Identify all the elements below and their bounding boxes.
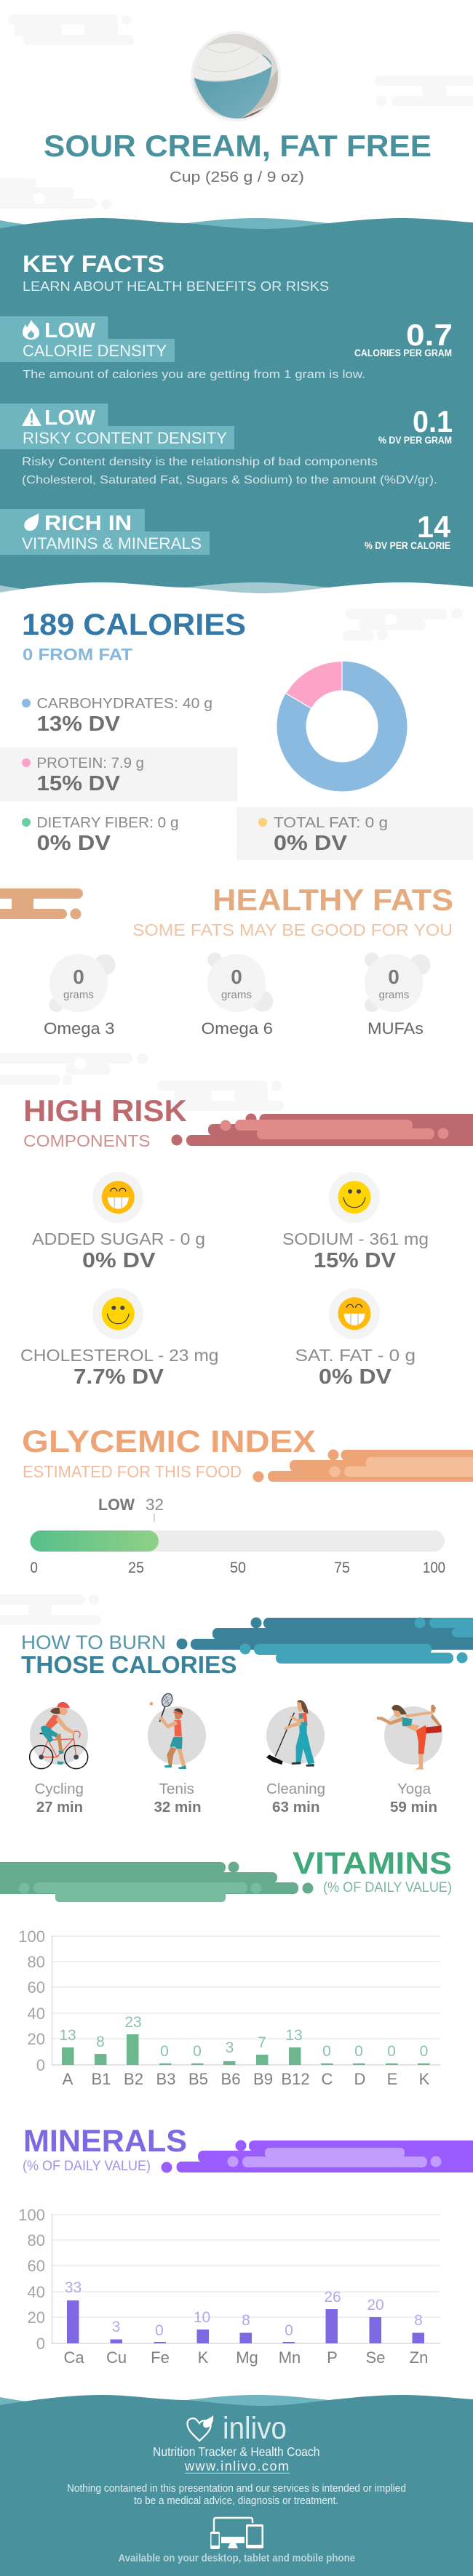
item: sodium: 15% DV [314, 1249, 397, 1272]
disclaimer: to be a medical advice, diagnosis or treatment. [134, 2495, 338, 2507]
brand name: inlivo [223, 2411, 287, 2446]
bar chart: vitamins: B12 [281, 2070, 310, 2088]
activity: cycling: 27 min [36, 1799, 83, 1815]
panel: healthy fats [0, 883, 453, 1038]
subheading: from fat: 0 FROM FAT [23, 645, 132, 664]
unit: CALORIES PER GRAM [354, 348, 452, 358]
panel: vitamins [0, 1846, 452, 2088]
bar chart: minerals: Ca [63, 2348, 84, 2367]
macro: total fat [236, 807, 473, 860]
bar chart: minerals: K [198, 2348, 209, 2367]
stat: omega 6 [201, 952, 274, 1038]
bar chart: vitamins [18, 1927, 440, 2088]
macro: carbohydrates: 13% DV [36, 713, 121, 736]
item: cholesterol: 7.7% DV [73, 1365, 164, 1389]
icon: leaf [24, 513, 39, 531]
value: 0.1 [413, 404, 453, 438]
disclaimer [67, 2482, 406, 2507]
bar chart: minerals: 0 [285, 2322, 293, 2339]
panel: minerals [18, 2124, 473, 2367]
bar chart: minerals [18, 2206, 440, 2367]
gauge scale: 75 [334, 1560, 350, 1576]
item: saturated fat: 0% DV [319, 1365, 392, 1389]
bar chart: vitamins: 60 [28, 1978, 45, 1997]
rating label [98, 1496, 164, 1522]
label: VITAMINS & MINERALS [22, 534, 202, 553]
activity: cleaning: 63 min [272, 1799, 320, 1815]
heading: calories: 189 CALORIES [22, 607, 246, 641]
serving size: Cup (256 g / 9 oz) [170, 169, 304, 185]
bar chart: minerals: 80 [28, 2231, 45, 2250]
heading: healthy fats: HEALTHY FATS [212, 883, 453, 917]
bar chart: vitamins: A [63, 2070, 73, 2088]
macro: dietary fiber [22, 814, 179, 855]
stat: mufas: 0 [388, 966, 400, 988]
bar chart: minerals: 0 [155, 2322, 164, 2339]
bar chart: vitamins: 20 [28, 2030, 45, 2048]
bar chart: vitamins: 0 [36, 2056, 45, 2074]
bar chart: minerals: 26 [324, 2289, 341, 2306]
bar chart: vitamins: 0 [160, 2043, 169, 2060]
bar chart: minerals: 60 [28, 2257, 45, 2275]
stat: mufas: grams [378, 989, 409, 1001]
icon: devices [210, 2518, 263, 2549]
item: added sugar: 0% DV [82, 1249, 156, 1272]
disclaimer: Nothing contained in this presentation and our services is intended or implied [67, 2482, 406, 2495]
subheading: components: COMPONENTS [23, 1131, 151, 1150]
bar chart: vitamins: B1 [92, 2070, 111, 2088]
bar chart: vitamins: B3 [156, 2070, 175, 2088]
bar chart: vitamins: 80 [28, 1953, 45, 1971]
heading: vitamins: VITAMINS [293, 1846, 452, 1881]
unit: % DV PER CALORIE [365, 540, 450, 551]
bar chart: vitamins: B5 [188, 2070, 208, 2088]
bar chart: vitamins: 0 [322, 2043, 331, 2060]
heading: bold line: THOSE CALORIES [21, 1651, 237, 1678]
bar chart: minerals: Zn [410, 2348, 428, 2367]
subheading: (% OF DAILY VALUE) [323, 1880, 452, 1895]
icon: yoga pose [377, 1704, 442, 1770]
activity: tennis [148, 1692, 206, 1815]
fact: rich in vitamins and minerals [0, 509, 451, 555]
bar chart: vitamins: 13 [285, 2027, 303, 2044]
food photo: bowl of sour cream [191, 31, 282, 122]
heading: high risk: HIGH RISK [23, 1094, 187, 1128]
panel: calories [0, 607, 473, 860]
stat: omega 3 [44, 954, 115, 1038]
bar chart: minerals: 100 [18, 2206, 45, 2224]
bar chart: vitamins: 0 [387, 2043, 396, 2060]
label: CALORIE DENSITY [23, 342, 167, 360]
bar chart: minerals: Cu [106, 2348, 127, 2367]
subheading: ESTIMATED FOR THIS FOOD [23, 1462, 242, 1481]
activity: yoga [377, 1704, 442, 1815]
activity: yoga: 59 min [390, 1799, 437, 1815]
icon: smiling face [338, 1181, 371, 1213]
macro: total fat: 0% DV [274, 832, 348, 855]
macro: total fat: TOTAL FAT: 0 g [274, 814, 388, 831]
website link: www.inlivo.com [184, 2459, 289, 2473]
bar chart: minerals: Mg [236, 2348, 258, 2367]
gauge scale: 25 [128, 1560, 144, 1576]
bar chart: vitamins: E [387, 2070, 397, 2088]
activity: cycling [30, 1702, 88, 1815]
stat: omega 6: grams [221, 989, 252, 1001]
bar chart: vitamins: D [354, 2070, 365, 2088]
icon: inlivo heart logo [187, 2415, 213, 2441]
gauge scale: 50 [230, 1560, 246, 1576]
bar chart: minerals: 3 [112, 2319, 120, 2335]
panel: glycemic index [22, 1424, 473, 1576]
bar chart: minerals: 20 [28, 2308, 45, 2327]
bar chart: vitamins: 0 [420, 2043, 428, 2060]
subheading: LEARN ABOUT HEALTH BENEFITS OR RISKS [23, 279, 329, 294]
description: (Cholesterol, Saturated Fat, Sugars & Sodium) to the amount (%DV/gr). [22, 474, 437, 486]
stat: omega 3: 0 [73, 966, 84, 988]
bar chart: minerals: 8 [242, 2312, 250, 2329]
item: sodium: SODIUM - 361 mg [282, 1229, 429, 1248]
bar chart: minerals: Mn [279, 2348, 301, 2367]
bar chart: vitamins: 40 [28, 2005, 45, 2023]
icon: person sweeping [266, 1700, 314, 1767]
description [22, 456, 437, 486]
stat: mufas [365, 952, 431, 1038]
bar chart: vitamins: 23 [124, 2014, 142, 2031]
gauge scale [31, 1560, 445, 1576]
bar chart: vitamins: B2 [124, 2070, 143, 2088]
stat: omega 6: Omega 6 [201, 1019, 273, 1038]
macro: protein: PROTEIN: 7.9 g [36, 755, 144, 771]
stat: omega 3: Omega 3 [44, 1019, 115, 1038]
rating label: 32 [146, 1496, 164, 1514]
fact: risky content density [0, 404, 453, 486]
item: added sugar: ADDED SUGAR - 0 g [32, 1229, 205, 1248]
bar chart: vitamins: C [322, 2070, 333, 2088]
bar chart: vitamins: 3 [226, 2039, 234, 2056]
activity: tennis: Tenis [159, 1781, 194, 1797]
tagline: Nutrition Tracker & Health Coach [153, 2444, 320, 2459]
activity: yoga: Yoga [397, 1781, 432, 1797]
bar chart: minerals: 0 [36, 2335, 45, 2353]
item: cholesterol: CHOLESTEROL - 23 mg [20, 1346, 218, 1365]
donut chart [286, 661, 393, 777]
rating: LOW [44, 406, 96, 430]
bar chart: vitamins: B9 [253, 2070, 273, 2088]
item: saturated fat: SAT. FAT - 0 g [295, 1346, 416, 1365]
bar chart: vitamins: 0 [354, 2043, 363, 2060]
availability note: Available on your desktop, tablet and mobile phone [118, 2552, 355, 2564]
macro: protein: 15% DV [36, 772, 121, 795]
rating label: LOW [98, 1496, 135, 1514]
icon: cyclist [30, 1702, 88, 1769]
panel: high risk components [20, 1094, 473, 1389]
bar chart: vitamins: 7 [258, 2034, 266, 2051]
icon: flame [23, 320, 39, 340]
description: Risky Content density is the relationship of bad components [22, 456, 378, 468]
icon: smiling face [102, 1297, 135, 1330]
gauge scale: 0 [31, 1560, 38, 1576]
icon: tennis player [150, 1692, 186, 1769]
gauge scale: 100 [423, 1560, 445, 1576]
item: saturated fat [295, 1288, 416, 1389]
macro: dietary fiber: DIETARY FIBER: 0 g [36, 814, 179, 831]
macro: carbohydrates: CARBOHYDRATES: 40 g [36, 695, 212, 712]
bar chart: vitamins: 100 [18, 1927, 45, 1946]
value: 0.7 [406, 318, 453, 352]
icon: grinning face [338, 1297, 371, 1330]
value: 14 [417, 510, 451, 544]
subheading: SOME FATS MAY BE GOOD FOR YOU [132, 920, 453, 939]
bar chart: minerals: Fe [151, 2348, 170, 2367]
bar chart: minerals: 33 [65, 2279, 82, 2296]
heading: key facts: KEY FACTS [23, 251, 164, 277]
panel: footer [0, 2395, 473, 2576]
bar chart: minerals: 20 [367, 2297, 384, 2314]
rating: LOW [44, 319, 96, 342]
bar chart: minerals: P [327, 2348, 338, 2367]
fact: calorie density [0, 316, 453, 381]
activity: tennis: 32 min [154, 1799, 201, 1815]
stat: omega 6: 0 [231, 966, 242, 988]
stat: omega 3: grams [63, 989, 94, 1001]
bar chart: minerals: 8 [414, 2312, 423, 2329]
heading: glycemic index: GLYCEMIC INDEX [22, 1424, 316, 1459]
bar chart: vitamins: 0 [193, 2043, 202, 2060]
rating: RICH IN [44, 512, 132, 535]
heading: HOW TO BURN [21, 1632, 166, 1653]
gauge bar [31, 1530, 445, 1552]
subheading: (% OF DAILY VALUE) [23, 2159, 151, 2174]
bar chart: vitamins: 13 [59, 2027, 76, 2044]
activity: cleaning [266, 1700, 325, 1815]
label: RISKY CONTENT DENSITY [23, 429, 227, 447]
icon: warning [22, 408, 41, 426]
bar chart: minerals: 10 [194, 2309, 210, 2326]
heading: minerals: MINERALS [23, 2124, 187, 2159]
bar chart: minerals: Se [366, 2348, 385, 2367]
bar chart: vitamins: B6 [221, 2070, 240, 2088]
icon: grinning face [102, 1181, 135, 1213]
item: sodium [282, 1172, 429, 1272]
activity: cleaning: Cleaning [266, 1781, 325, 1797]
title: SOUR CREAM, FAT FREE [44, 129, 432, 163]
unit: % DV PER GRAM [378, 435, 452, 446]
panel: how to burn calories [21, 1617, 473, 1815]
stat: mufas: MUFAs [367, 1019, 424, 1038]
description: The amount of calories you are getting from 1 gram is low. [23, 369, 365, 381]
macro: carbohydrates [22, 695, 212, 736]
bar chart: minerals: 40 [28, 2283, 45, 2301]
macro: dietary fiber: 0% DV [36, 832, 111, 855]
item: added sugar [32, 1172, 205, 1272]
bar chart: vitamins: 8 [96, 2034, 105, 2050]
activity: cycling: Cycling [35, 1781, 84, 1797]
bar chart: vitamins: K [419, 2070, 430, 2088]
item: cholesterol [20, 1288, 218, 1389]
macro: protein [0, 747, 237, 801]
panel: key facts [0, 218, 473, 598]
